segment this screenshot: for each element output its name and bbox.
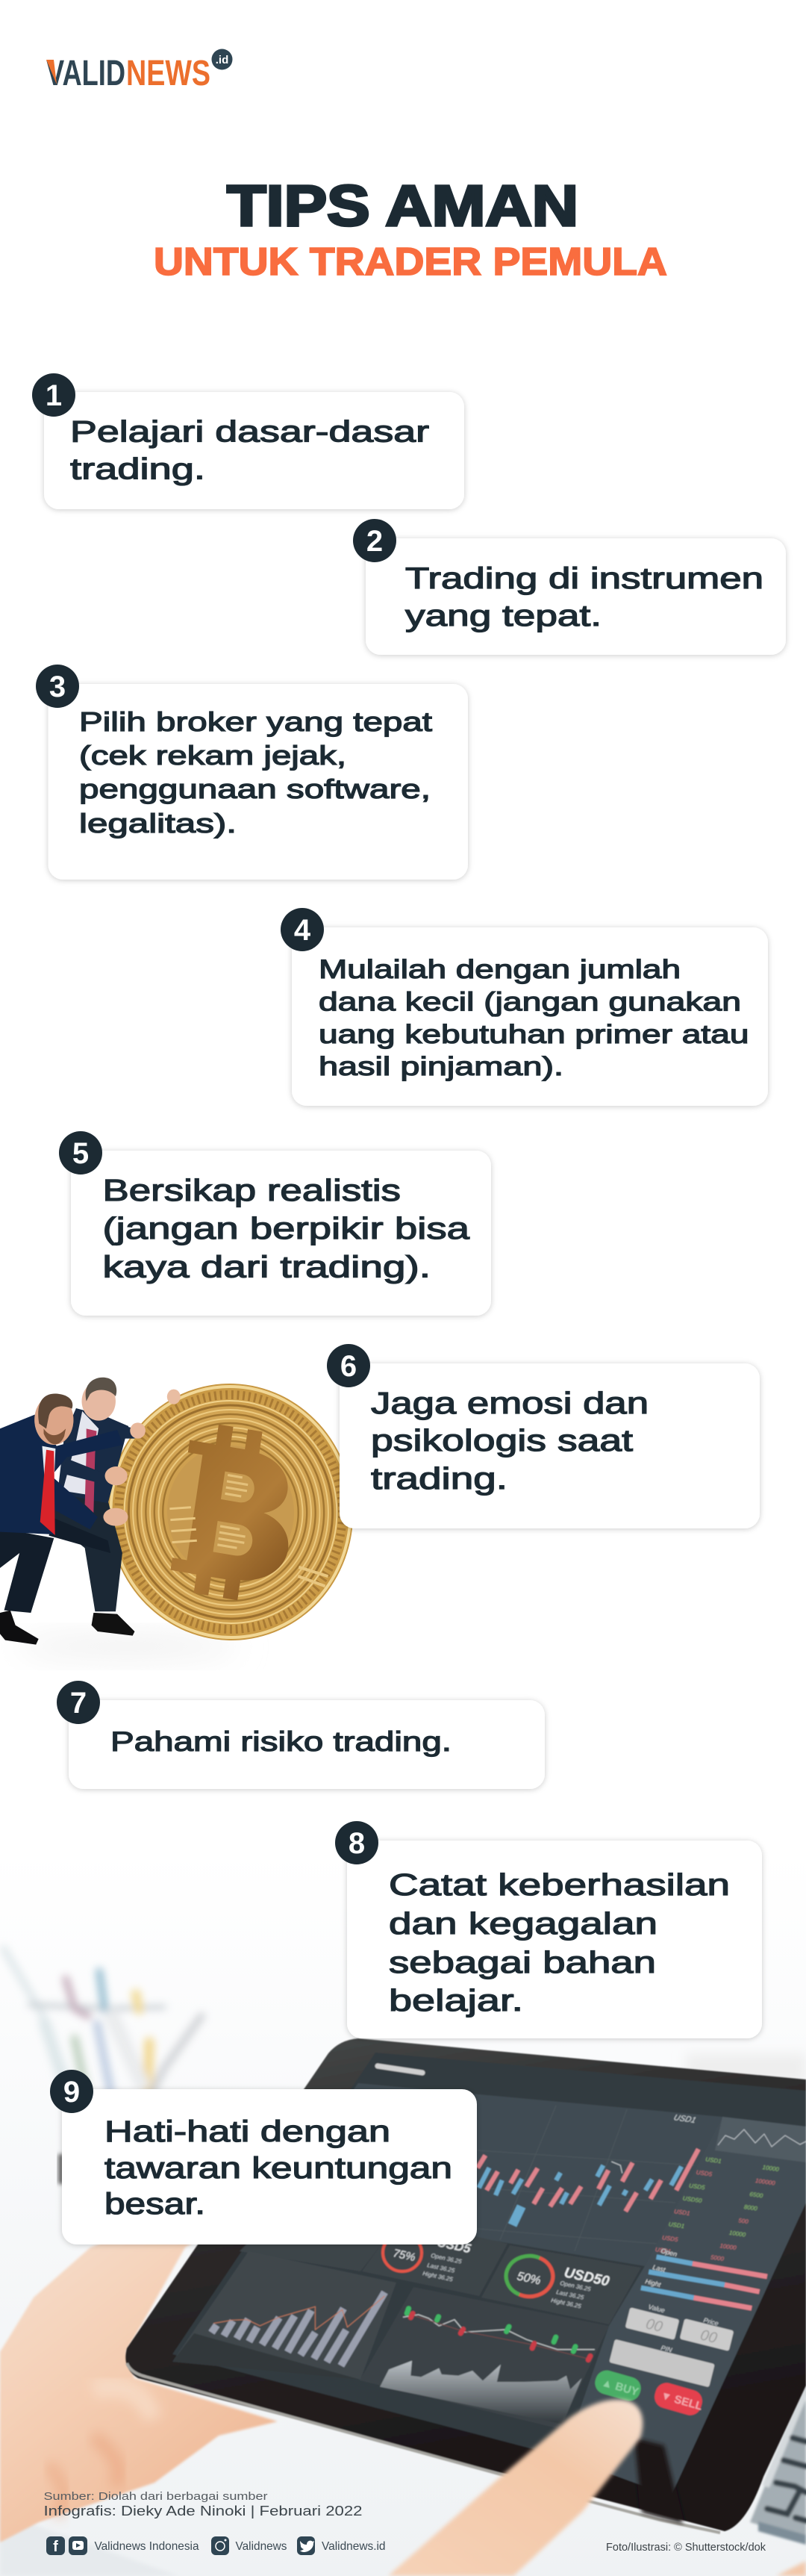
desk edge [0,2513,179,2576]
right column order panel [563,2117,806,2496]
right column order panel: USD1 [705,2156,722,2165]
PIN input [609,2339,715,2387]
note 6 text: Jaga emosi dan [371,1386,649,1420]
note 1 text [70,415,429,485]
gauge panel 3: USD50 50%: Last 36.25 [556,2289,585,2301]
note 3 text: Pilih broker yang tepat [79,706,432,737]
gauge panel 2: USD5 75%: Last 36.25 [427,2262,456,2274]
note 5 text: Bersikap realistis [103,1173,401,1207]
note 6 text: psikologis saat [371,1423,634,1457]
note 4 text: Mulailah dengan jumlah [319,955,681,984]
note 4 [281,908,768,1106]
sell button: ▼ SELL [659,2389,704,2413]
rear man [51,1378,181,1636]
note 8 text: sebagai bahan [389,1945,656,1979]
note 9 text: besar. [104,2188,205,2221]
right column order panel: 10000 [728,2230,746,2239]
blurred pens in the background [4,1949,202,2091]
badge 9: 9 [63,2076,80,2109]
note 7 [57,1681,545,1789]
candlestick chart panel: USD1 [672,2113,697,2125]
badge 3: 3 [49,671,66,703]
title: TIPS AMAN [227,174,578,238]
right column order panel: 8000 [743,2203,758,2212]
badge 5: 5 [72,1137,89,1170]
note 6 text: trading. [371,1461,507,1496]
photo credit: Foto/Ilustrasi: © Shutterstock/dok [606,2542,766,2554]
source and credit [43,2490,363,2519]
title [154,174,667,284]
badge 4: 4 [294,914,311,947]
badge 4 [281,908,324,951]
note 3 text [79,706,432,839]
icon: instagram [211,2536,229,2555]
badge 1: 1 [46,379,62,412]
price input [680,2318,734,2351]
note 2 text: Trading di instrumen [405,562,763,595]
gauge panel 3: USD50 50%: 50% [516,2270,542,2288]
note 2 [353,519,786,655]
logo: Validnews.id: .id [216,54,228,66]
gauge panel 3: USD50 50%: Open 36.25 [560,2280,592,2293]
bitcoin coin [99,1375,362,1649]
candlestick chart panel [269,2083,722,2266]
icon: twitter [297,2536,315,2555]
note 9 [50,2070,477,2244]
gauge panel 1 [240,2203,399,2271]
right column order panel: PIN [660,2344,673,2354]
badge 2 [353,519,396,562]
gauge panel 2: USD5 75%: 75% [392,2247,416,2264]
note 3 text: penggunaan software, [79,774,431,804]
note 8 text [389,1867,730,2017]
gauge panel 2: USD5 75% [362,2219,507,2296]
note 7 text: Pahami risiko trading. [110,1726,452,1757]
line chart panel [360,2287,609,2429]
reflection in lower screen [634,2438,683,2524]
bitcoin symbol [168,1420,304,1608]
right column order panel: 100000 [755,2177,776,2187]
pointing finger [388,2400,643,2576]
right column order panel: 5000 [710,2254,725,2262]
note 2 text [405,562,763,632]
dark blurred object behind note 9 [58,2154,64,2184]
right column order panel: USD1 [674,2208,690,2217]
tablet body [125,2038,806,2533]
illustration: businessmen pushing bitcoin [0,1375,362,1658]
right column order panel: Price [703,2316,719,2327]
right column order panel: 500 [738,2217,749,2225]
value input: 00 [644,2315,664,2336]
right column order panel: USD1 [668,2221,685,2230]
gauge panel 3: USD50 50%: Hight 36.25 [551,2297,582,2310]
note 8 text: dan kegagalan [389,1906,657,1941]
right column order panel: Value [648,2303,666,2314]
note 4 text: hasil pinjaman). [319,1052,563,1081]
social links: Validnews.id [322,2540,385,2553]
logo: Validnews.id: VALID [46,54,125,93]
note 9 text [104,2115,452,2221]
right column order panel: USD50 [682,2195,703,2204]
badge 7: 7 [70,1687,87,1720]
right column order panel: USD5 [689,2183,706,2191]
right column order panel: Hight [645,2277,662,2289]
right edge skin blur [776,2561,806,2576]
sell button [652,2380,706,2418]
left hand behind tablet [0,2229,278,2542]
desk background [0,1852,806,2576]
badge 6 [327,1344,370,1387]
bar chart panel [172,2251,396,2380]
social links: Validnews [236,2540,287,2553]
badge 2: 2 [366,525,383,558]
badge 6: 6 [340,1350,357,1383]
photo: hands holding trading tablet [0,1852,806,2576]
note 4 text: dana kecil (jangan gunakan [319,987,741,1017]
note 5 text [103,1173,469,1284]
gauge panel 2: USD5 75%: USD5 [436,2235,472,2256]
badge 7 [57,1681,100,1724]
note 6 [327,1344,760,1528]
note 9 text: Hati-hati dengan [104,2115,390,2148]
source and credit: Sumber: Diolah dari berbagai sumber [43,2490,268,2503]
note 6 text [371,1386,649,1496]
buy button [593,2368,643,2404]
icon: facebook: f [53,2539,58,2555]
badge 9 [50,2070,93,2113]
note 9 text: tawaran keuntungan [104,2152,452,2185]
right column order panel: USD5 [696,2169,713,2178]
note 5 text: (jangan berpikir bisa [103,1211,469,1245]
note 3 text: legalitas). [79,808,237,839]
note 8 [335,1821,762,2038]
note 1 text: Pelajari dasar-dasar [70,415,429,448]
ground shadow [15,1634,239,1658]
right column order panel: USD1 [655,2246,672,2255]
tablet screen [172,2053,806,2496]
note 1 [32,373,464,509]
front man [0,1393,128,1645]
note 4 text [319,955,749,1081]
icon: facebook [46,2536,65,2555]
subtitle: UNTUK TRADER PEMULA [154,240,667,284]
right column order panel: Last [652,2263,666,2274]
price input: 00 [699,2327,719,2347]
note 2 text: yang tepat. [405,600,602,632]
buy button: ▲ BUY [600,2376,640,2399]
note 5 text: kaya dari trading). [103,1250,431,1284]
social links: Validnews Indonesia [94,2540,199,2553]
icon: youtube [69,2536,87,2555]
badge 3 [36,665,79,708]
gauge panel 2: USD5 75%: Hight 36.25 [422,2270,454,2283]
right column order panel: 6500 [749,2191,763,2200]
source and credit: Infografis: Dieky Ade Ninoki | Februari 2022 [43,2504,363,2519]
gauge panel 2: USD5 75%: Open 36.25 [431,2252,463,2265]
note 1 text: trading. [70,452,205,485]
men (drawn in stretched coordinates) [0,1378,181,1645]
grey backdrop patch top right [686,2053,806,2083]
speaker highlight [378,2066,422,2073]
badge 1 [32,373,75,417]
right column order panel: 10000 [719,2242,737,2251]
right column order panel: Open [660,2247,678,2258]
value input [625,2307,679,2340]
note 8 text: Catat keberhasilan [389,1867,730,1902]
note 3 [36,665,468,880]
note 3 text: (cek rekam jejak, [79,740,346,771]
right column order panel: USD5 [662,2234,679,2243]
badge 8 [335,1821,378,1864]
badge 5 [59,1131,102,1175]
note 5 [59,1131,491,1316]
logo: Validnews.id: NEWS [126,54,210,93]
tablet metal edge [127,2363,720,2533]
social links [46,2536,385,2555]
gauge panel 3: USD50 50%: USD50 [563,2265,611,2290]
logo: Validnews.id [46,49,233,93]
right column order panel: 10000 [762,2164,780,2173]
note 8 text: belajar. [389,1983,523,2017]
laptop keyboard [750,2386,806,2545]
gauge panel 3: USD50 50% [481,2245,641,2324]
note 4 text: uang kebutuhan primer atau [319,1020,749,1049]
badge 8: 8 [349,1827,365,1860]
